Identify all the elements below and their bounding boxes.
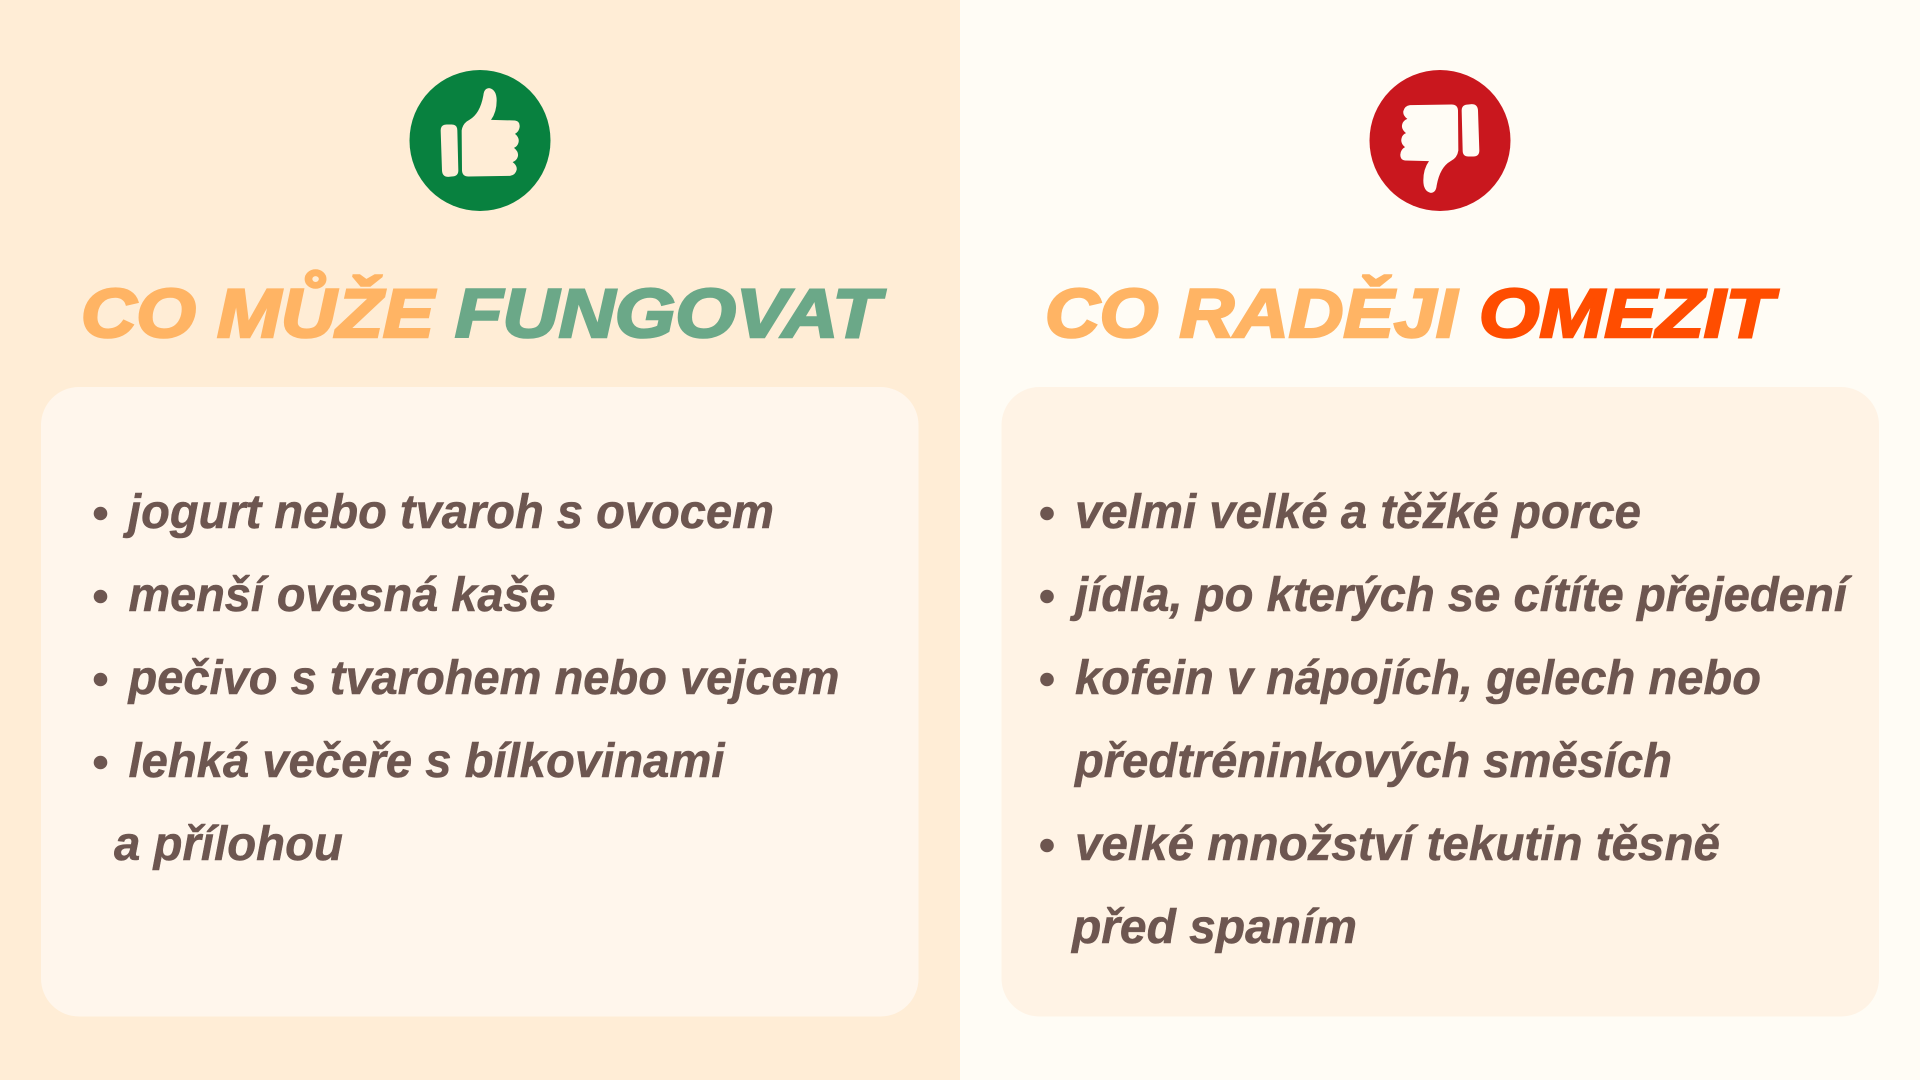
heading: co raději omezit [1045,275,1778,352]
icon: thumbs down [1370,70,1510,211]
heading: co raději omezit: CO RADĚJI [1045,275,1459,352]
icon: thumbs up [410,70,550,211]
bullet list: suitable foods: a přílohou [114,818,343,871]
bullet list: foods to limit: velké množství tekutin těsně [1075,818,1720,871]
panel: co může fungovat [0,0,960,1080]
bullet list: foods to limit: jídla, po kterých se cítíte přejedení [1069,569,1853,622]
bullet list: foods to limit: předtréninkových směsích [1073,735,1672,788]
bullet list: foods to limit: kofein v nápojích, gelech nebo [1075,652,1761,705]
bullet list: suitable foods: lehká večeře s bílkovinami [128,735,726,788]
heading: co může fungovat [81,270,885,352]
heading: co raději omezit: OMEZIT [1479,275,1778,352]
bullet list: suitable foods: pečivo s tvarohem nebo vejcem [127,652,840,705]
bullet list: foods to limit: před spaním [1070,901,1357,954]
card: list of foods to limit [1002,387,1879,1016]
panel: co raději omezit [960,0,1920,1080]
heading: co může fungovat: CO MŮŽE [81,270,436,352]
bullet list: suitable foods [94,486,839,871]
bullet list: suitable foods: jogurt nebo tvaroh s ovocem [122,486,774,539]
bullet list: foods to limit [1040,486,1853,954]
bullet list: suitable foods: menší ovesná kaše [128,569,556,622]
heading: co může fungovat: FUNGOVAT [455,275,885,352]
card: list of suitable foods [41,387,918,1016]
bullet list: foods to limit: velmi velké a těžké porce [1075,486,1641,539]
